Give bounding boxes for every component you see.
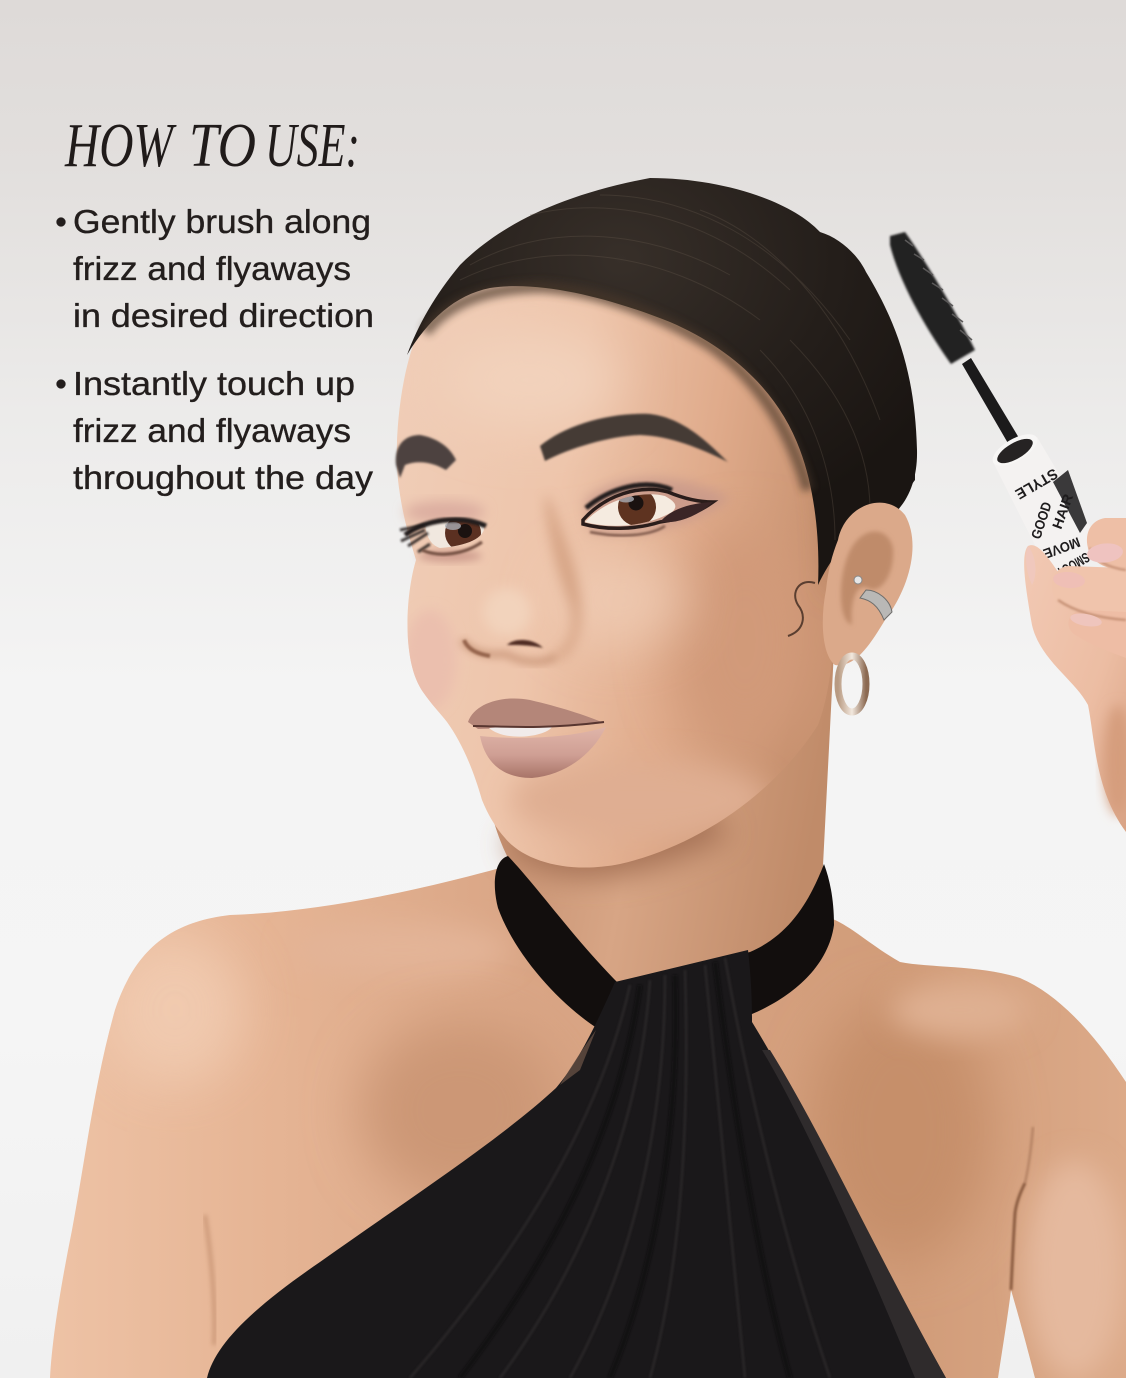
neck — [490, 650, 834, 1000]
brush — [890, 232, 975, 364]
title — [64, 112, 360, 180]
ear back hair — [825, 440, 915, 590]
choker — [495, 856, 834, 1030]
tube: STYLE — [1012, 465, 1060, 502]
tube: SMOOTH — [1048, 549, 1092, 584]
title: HOW — [64, 112, 177, 180]
tube: HAIR — [1049, 492, 1076, 531]
eyebrows — [396, 414, 728, 478]
title: USE: — [265, 112, 360, 180]
palm and wrist — [1024, 545, 1126, 832]
instruction 1 — [56, 203, 374, 334]
hair strands — [460, 195, 880, 540]
ear — [788, 503, 913, 665]
shoulders and chest — [40, 850, 1126, 1378]
instruction 1: frizz and flyaways — [73, 250, 351, 287]
soft hairline — [425, 287, 808, 490]
mascara wand — [890, 232, 1096, 584]
instruction 2: throughout the day — [73, 459, 374, 496]
hand — [1024, 518, 1126, 832]
tube — [988, 428, 1096, 584]
eye: viewer right — [583, 478, 730, 535]
tube: GOOD — [1028, 500, 1055, 541]
lips — [468, 698, 606, 778]
instruction 2 — [56, 365, 374, 496]
bristle tips — [905, 240, 972, 340]
title: TO — [189, 112, 256, 180]
instruction 1: Gently brush along — [73, 203, 371, 240]
earrings — [838, 576, 892, 712]
rod — [962, 358, 1019, 445]
instruction 2: frizz and flyaways — [73, 412, 351, 449]
nose — [462, 495, 581, 662]
tube: MOVE — [1041, 534, 1082, 562]
hair — [407, 178, 917, 585]
dress — [207, 950, 946, 1378]
face — [396, 286, 832, 868]
instruction 1: in desired direction — [73, 297, 374, 334]
instruction 2: Instantly touch up — [73, 365, 355, 402]
fingers — [1087, 518, 1126, 570]
eye: viewer left — [400, 501, 486, 562]
